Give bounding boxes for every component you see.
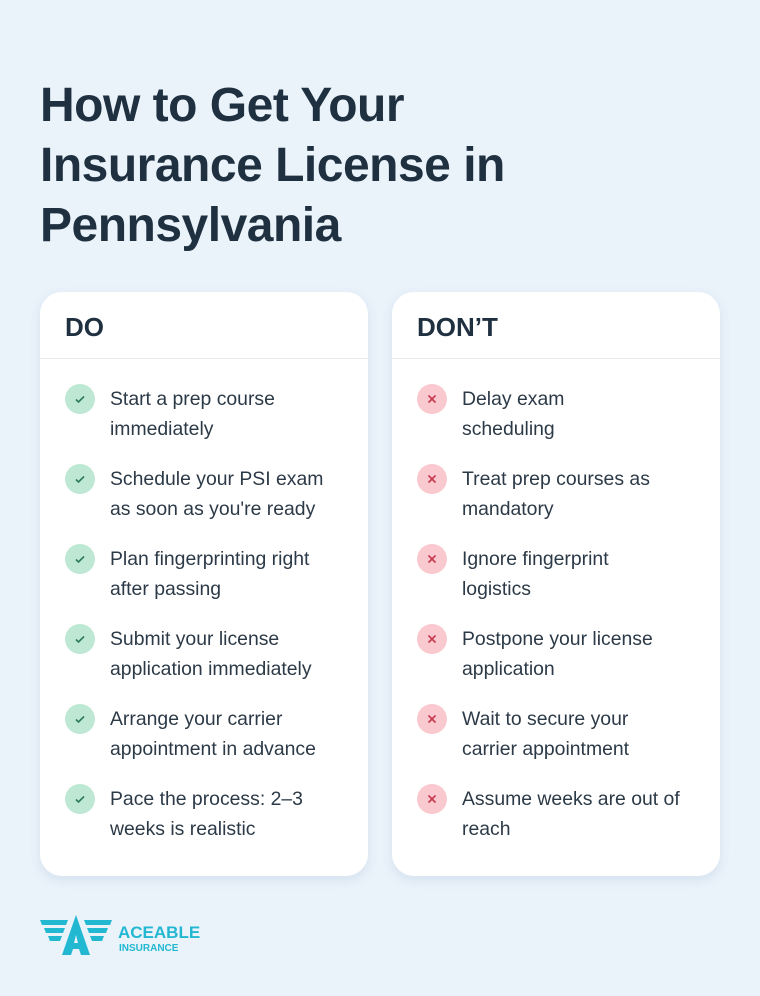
item 2	[65, 464, 323, 520]
item 6: Pace the process: 2–3	[110, 788, 303, 810]
item 3	[417, 544, 609, 600]
item 4: application	[462, 658, 555, 680]
item 3: Plan fingerprinting right	[110, 548, 309, 570]
item 3	[65, 544, 310, 600]
item 4	[417, 624, 653, 680]
item 1: Start a prep course	[110, 388, 275, 410]
item 3: logistics	[462, 578, 531, 600]
item 2	[417, 464, 650, 520]
item 5	[65, 704, 316, 760]
heading: dont	[392, 292, 720, 359]
item 6	[417, 784, 680, 840]
panel: dont	[392, 292, 720, 876]
logo: aceable insurance: ACEABLE	[118, 923, 200, 942]
item 3: after passing	[110, 578, 221, 600]
item 5: appointment in advance	[110, 738, 316, 760]
item 5: Wait to secure your	[462, 708, 628, 730]
heading: dont: DON’T	[417, 312, 498, 342]
item 5	[417, 704, 629, 760]
item 2: Treat prep courses as	[462, 468, 650, 490]
item 1	[65, 384, 275, 440]
item 2: mandatory	[462, 498, 554, 520]
item 4: application immediately	[110, 658, 312, 680]
title: Pennsylvania	[40, 199, 341, 252]
logo: aceable insurance	[40, 915, 200, 955]
item 1: Delay exam	[462, 388, 564, 410]
title	[40, 79, 505, 252]
item 5: carrier appointment	[462, 738, 629, 760]
item 6: weeks is realistic	[110, 818, 255, 840]
item 4	[65, 624, 312, 680]
item 1: scheduling	[462, 418, 555, 440]
heading: do: DO	[65, 312, 104, 342]
item 1: immediately	[110, 418, 213, 440]
panel: do	[40, 292, 368, 876]
item 6: Assume weeks are out of	[462, 788, 680, 810]
logo: aceable insurance: INSURANCE	[119, 943, 179, 954]
item 4: Submit your license	[110, 628, 279, 650]
item 3: Ignore fingerprint	[462, 548, 609, 570]
item 1	[417, 384, 564, 440]
title: Insurance License in	[40, 139, 505, 192]
item 6: reach	[462, 818, 511, 840]
item 5: Arrange your carrier	[110, 708, 282, 730]
heading: do	[40, 292, 368, 359]
item 2: Schedule your PSI exam	[110, 468, 323, 490]
item 4: Postpone your license	[462, 628, 653, 650]
title: How to Get Your	[40, 79, 404, 132]
item 6	[65, 784, 303, 840]
item 2: as soon as you're ready	[110, 498, 315, 520]
